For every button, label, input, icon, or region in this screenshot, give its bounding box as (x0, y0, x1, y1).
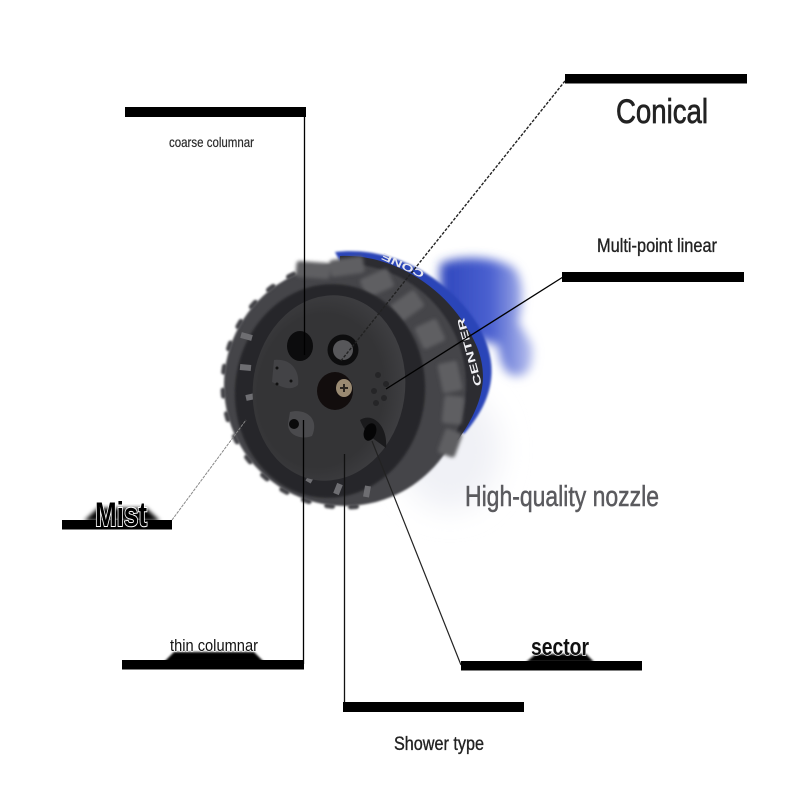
dark band carrying the labels (340, 256, 483, 460)
multi-point holes (371, 372, 389, 406)
callout: sector (372, 441, 642, 670)
text halo (164, 652, 264, 662)
conical hole (328, 334, 358, 366)
caption: High-quality nozzle: High-quality nozzle (465, 481, 659, 513)
grip scallops (223, 263, 467, 507)
bar (125, 107, 306, 117)
leader line (304, 112, 306, 355)
leader line (172, 420, 246, 520)
bar (461, 661, 642, 670)
label: Mist (95, 496, 147, 534)
label: Shower type (394, 734, 484, 755)
callout: coarse columnar (125, 107, 306, 355)
nozzle face (241, 285, 417, 491)
notches around the rim (240, 335, 368, 497)
centre screw (317, 372, 353, 410)
bar (122, 660, 304, 670)
label: thin columnar (170, 636, 258, 655)
leader line (302, 420, 304, 664)
leader line (372, 441, 461, 665)
blue collar (335, 251, 492, 434)
label: Conical (616, 93, 708, 131)
sector slot (360, 418, 386, 448)
label: CONE: CONE (379, 250, 426, 279)
grip ridges (295, 256, 464, 458)
thin columnar hole (288, 411, 314, 438)
text halo (526, 654, 594, 662)
blue stem (440, 258, 532, 376)
outer grip ring (224, 264, 466, 506)
nozzle soft shadow (400, 390, 500, 510)
mist nozzle (272, 360, 298, 388)
label: coarse columnar (169, 134, 254, 150)
coarse columnar hole (287, 331, 313, 361)
bar (565, 74, 747, 84)
bar (562, 272, 744, 282)
dashed leader (340, 81, 565, 362)
leader line (386, 277, 563, 389)
nozzle photo illustration (223, 250, 532, 510)
label: Multi-point linear (597, 236, 718, 257)
bar (343, 702, 524, 712)
label: sector (531, 634, 589, 661)
inner face ring (224, 275, 436, 507)
label: CENTER: CENTER (455, 316, 485, 387)
callout: multi-point linear (386, 236, 744, 389)
text halo (84, 508, 160, 521)
bar (62, 520, 172, 530)
leader line (344, 454, 346, 707)
callout: shower type (343, 454, 524, 755)
callout: thin columnar (122, 420, 304, 670)
callout: mist (62, 420, 246, 534)
callout: conical (340, 74, 747, 362)
